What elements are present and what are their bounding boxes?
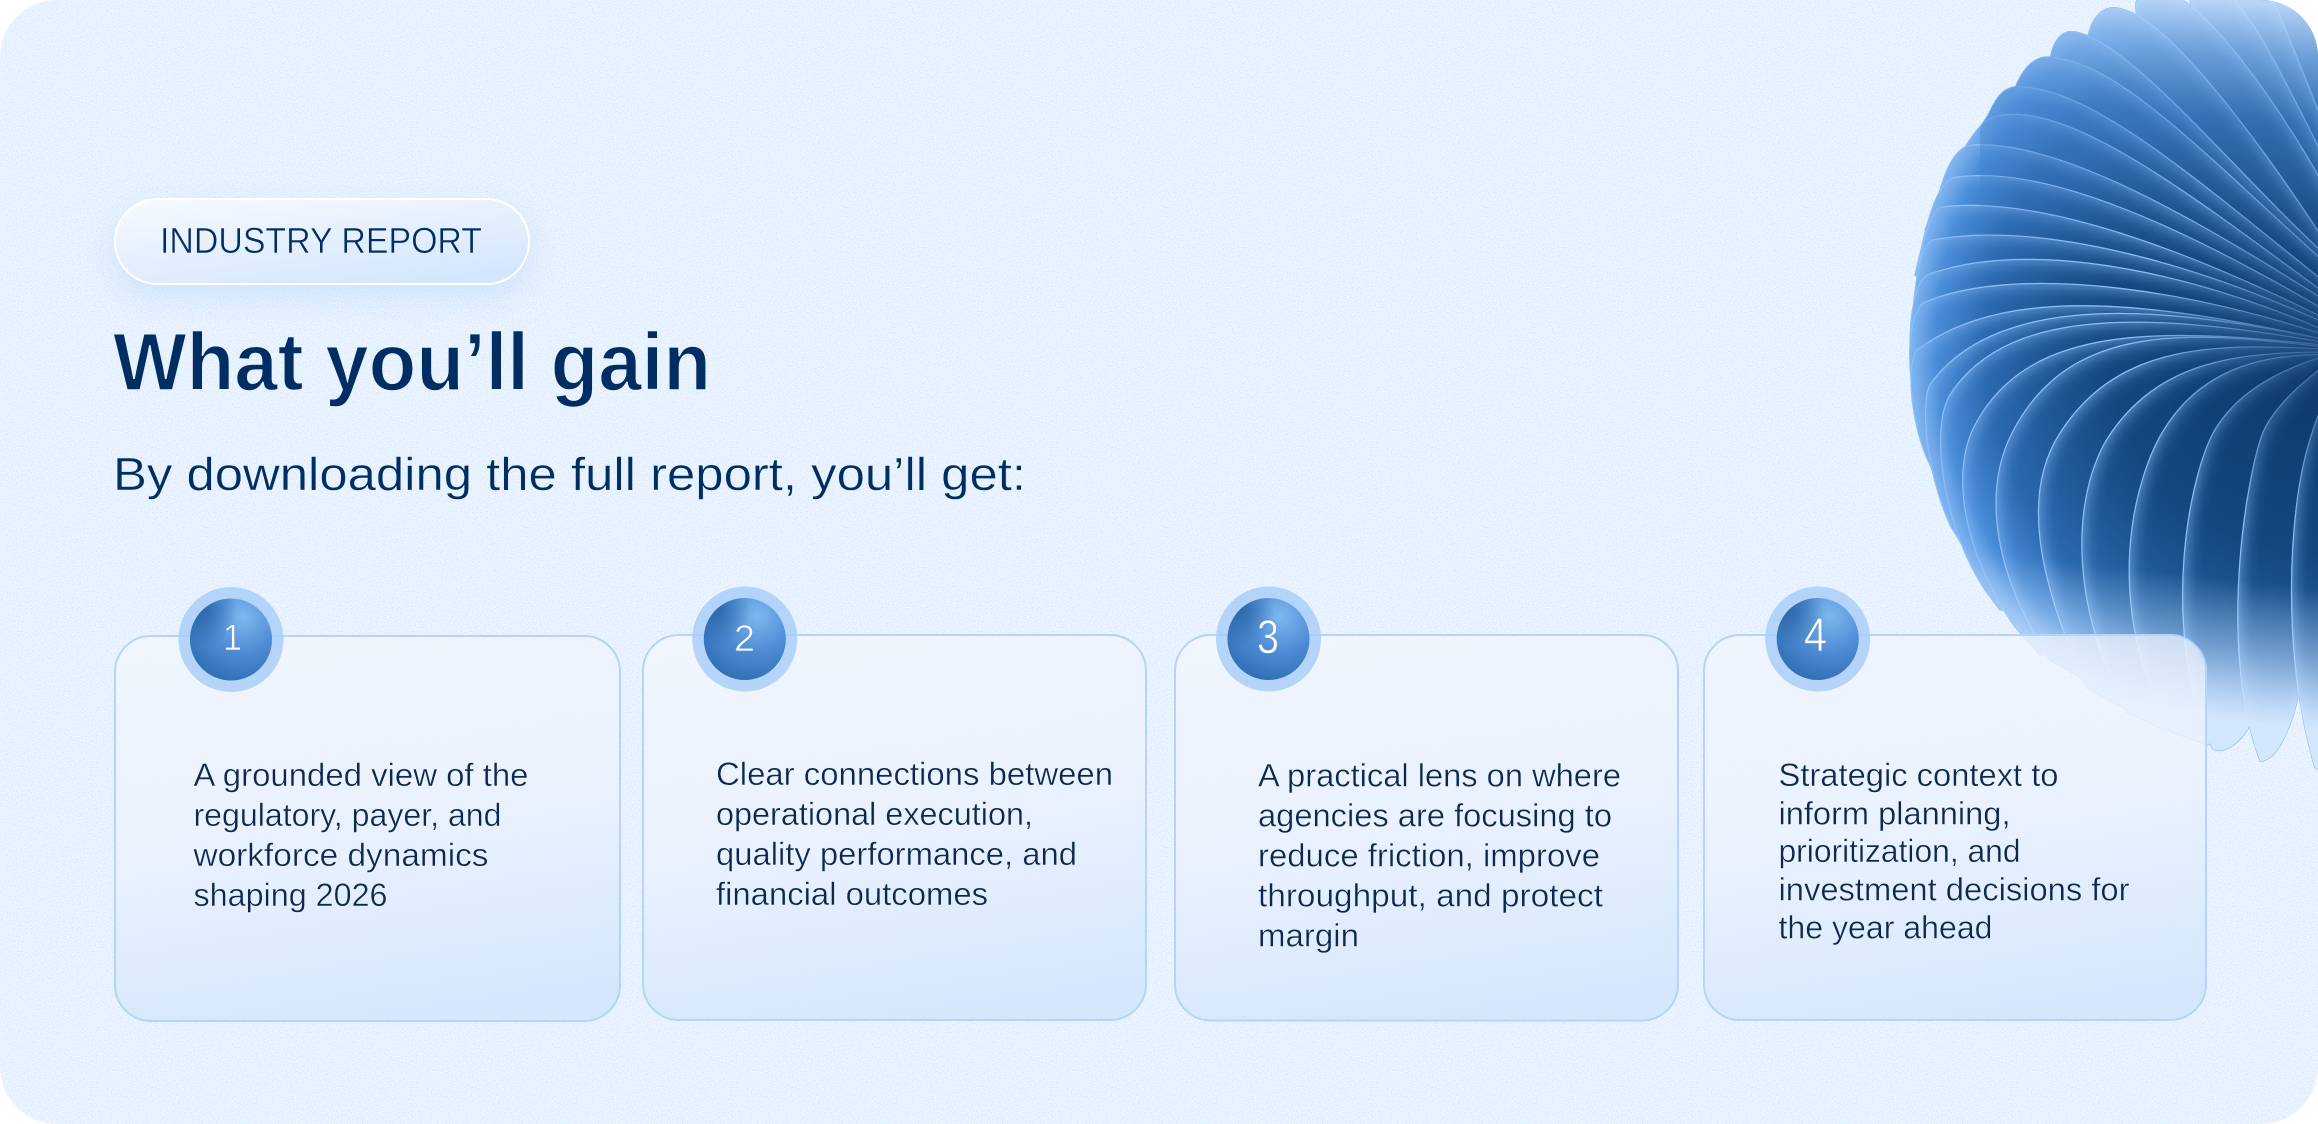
card 1 text: regulatory, payer, and xyxy=(194,797,502,833)
number badge 2: 2 xyxy=(734,618,755,659)
panel: card 4 xyxy=(1704,586,2206,1020)
card 1 text xyxy=(192,757,529,913)
card 3 text: reduce friction, improve xyxy=(1258,838,1600,874)
card 4 text: prioritization, and xyxy=(1778,833,2020,869)
title: What you’ll gain xyxy=(113,317,711,408)
card 2 text: financial outcomes xyxy=(716,876,988,912)
card 4 text: investment decisions for xyxy=(1778,872,2130,908)
badge: industry report: INDUSTRY REPORT xyxy=(160,220,482,261)
number badge 1: 1 xyxy=(223,617,242,658)
card 1 text: A grounded view of the xyxy=(194,757,528,793)
card 1 text: workforce dynamics xyxy=(192,837,489,873)
card 3 text: margin xyxy=(1258,918,1359,954)
number badge 2 xyxy=(692,586,797,692)
panel: card 1 xyxy=(115,587,620,1021)
card 3 text: A practical lens on where xyxy=(1258,758,1621,794)
card 2 text xyxy=(716,756,1113,912)
card 3 text: agencies are focusing to xyxy=(1258,798,1612,834)
card 3 text: throughput, and protect xyxy=(1258,878,1603,914)
card 4 text: the year ahead xyxy=(1778,910,1992,946)
subtitle: By downloading the full report, you’ll get: xyxy=(113,448,1026,500)
card 2 text: quality performance, and xyxy=(716,836,1077,872)
card 1 text: shaping 2026 xyxy=(194,877,388,913)
panel: card 2 xyxy=(643,586,1146,1020)
number badge 3: 3 xyxy=(1257,610,1279,663)
card 4 text xyxy=(1778,757,2130,946)
card 4 text: Strategic context to xyxy=(1778,757,2058,793)
badge: industry report xyxy=(115,199,529,284)
number badge 4: 4 xyxy=(1804,608,1827,661)
card 4 text: inform planning, xyxy=(1778,796,2010,832)
card 2 text: Clear connections between xyxy=(716,756,1113,792)
card 3 text xyxy=(1258,758,1621,954)
number badge 4 xyxy=(1765,586,1870,692)
card 2 text: operational execution, xyxy=(716,796,1033,832)
icon: blue fan of curved blades xyxy=(1880,0,2318,790)
number badge 3 xyxy=(1216,586,1321,692)
number badge 1 xyxy=(178,587,284,692)
panel: card 3 xyxy=(1175,586,1678,1020)
